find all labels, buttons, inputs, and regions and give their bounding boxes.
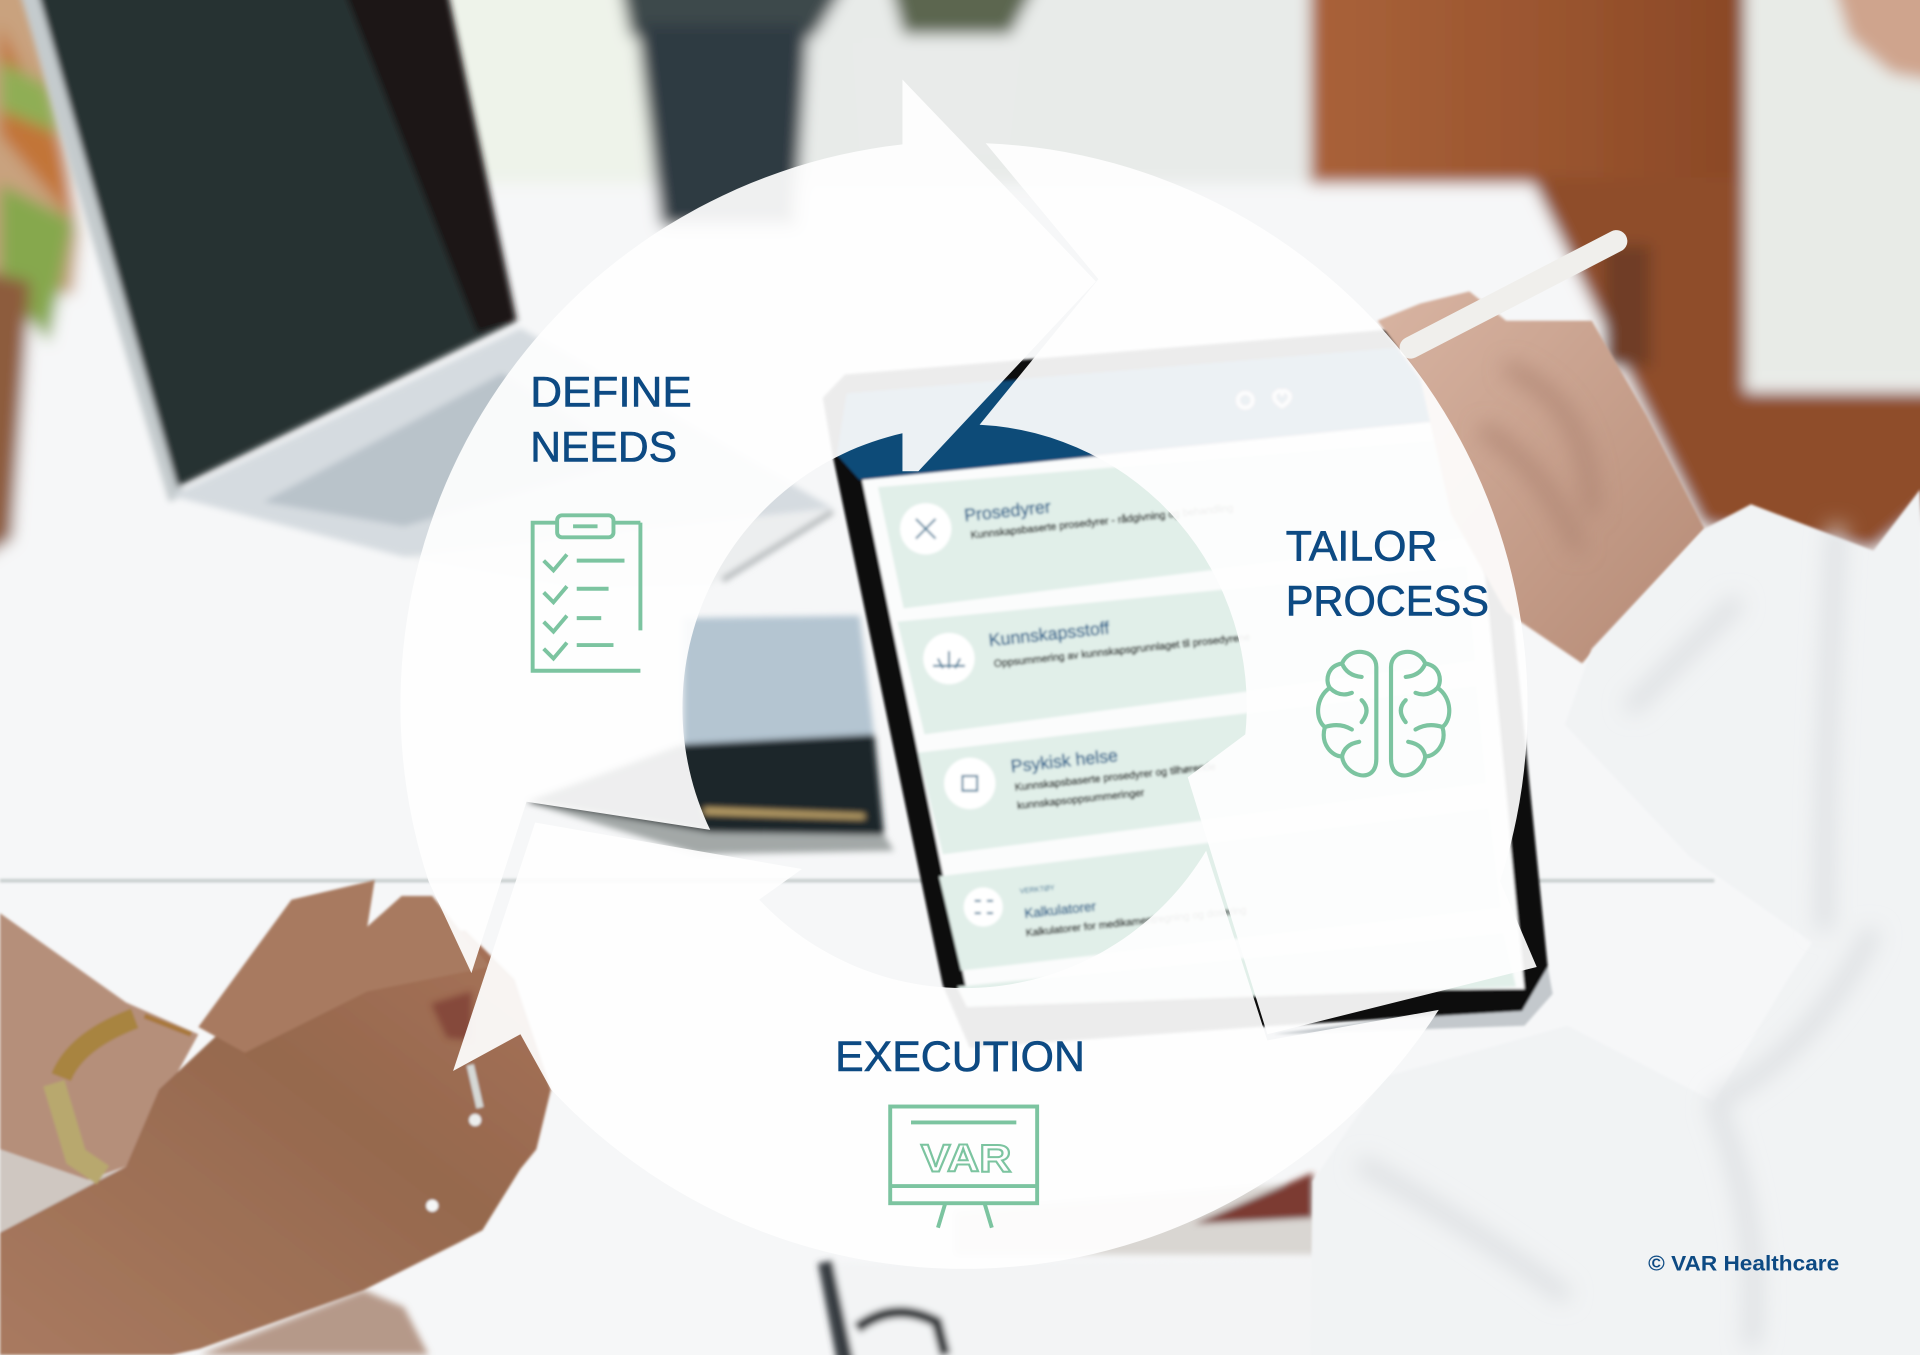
screen cards (878, 438, 1516, 1006)
icon: clipboard checklist (533, 515, 640, 671)
card text: kunnskapsoppsummeringer (1017, 788, 1145, 812)
card text: Kunnskapsbaserte prosedyrer - rådgivning og behandling (970, 502, 1234, 542)
card text: Kunnskapsstoff (988, 618, 1110, 650)
patient hands (0, 880, 551, 1355)
card text: Prosedyrer (963, 496, 1052, 525)
heading: define needs (530, 368, 692, 471)
card text: Kalkulatorer for medikamentregning og dosering (1025, 905, 1247, 939)
doctor hand and pen (1378, 241, 1704, 663)
sleeve folds (1359, 526, 1873, 1346)
card text: Psykisk helse (1010, 745, 1119, 776)
icon: presentation board (890, 1107, 1037, 1228)
fingers (198, 880, 490, 1053)
card text: VERKTØY (1019, 883, 1055, 896)
heading: define needs: DEFINE (530, 368, 692, 416)
icon: brain (1318, 652, 1449, 775)
card icons (900, 503, 1003, 927)
notebook on the table (527, 616, 894, 854)
heading: execution: EXECUTION (835, 1033, 1085, 1081)
clipboard on the table (818, 1173, 1337, 1355)
card text (963, 496, 1251, 939)
card text: Kalkulatorer (1024, 899, 1097, 921)
arrow: execution (453, 823, 1439, 1269)
card text: Oppsummering av kunnskapsgrunnlaget til prosedyrene (993, 632, 1251, 670)
cycle arrows (400, 80, 1537, 1269)
heading: tailor process: PROCESS (1286, 578, 1489, 626)
heading: define needs: NEEDS (530, 423, 677, 471)
arrow: tailor process (980, 143, 1537, 1034)
icon: presentation board: VAR (921, 1137, 1011, 1180)
bracelet (61, 1018, 135, 1077)
heading: tailor process: TAILOR (1286, 523, 1438, 571)
arrow: define needs (400, 80, 1096, 973)
copyright: © VAR Healthcare (1648, 1253, 1839, 1276)
doctor sleeve (1310, 490, 1920, 1355)
tablet (823, 328, 1553, 1048)
table edge (0, 879, 1714, 883)
forearm (0, 913, 198, 1180)
header icons (1238, 391, 1290, 408)
card text: Kunnskapsbaserte prosedyrer og tilhørende (1014, 762, 1217, 794)
heading: tailor process (1286, 523, 1489, 626)
laptop (18, 0, 833, 588)
